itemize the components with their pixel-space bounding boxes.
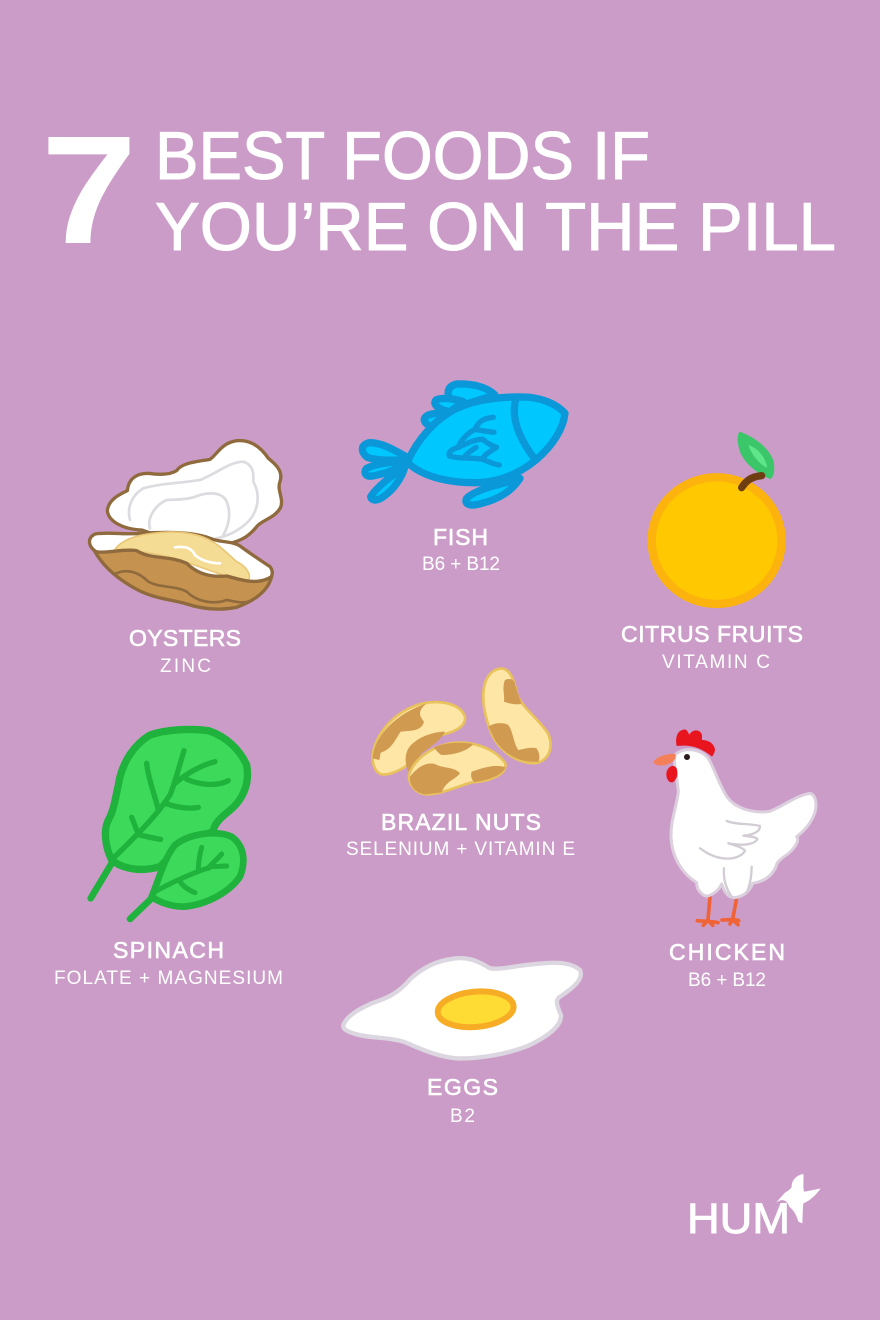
title line 1: BEST FOODS IF bbox=[155, 118, 650, 194]
panel: eggs bbox=[343, 958, 581, 1127]
nutrient: brazil nuts: SELENIUM + VITAMIN E bbox=[346, 839, 575, 860]
panel: brazil nuts bbox=[346, 669, 575, 860]
logo: HUM bbox=[687, 1174, 821, 1243]
icon: fish bbox=[362, 384, 565, 505]
title line 2: YOU’RE ON THE PILL bbox=[155, 189, 836, 265]
nutrient: citrus fruits: VITAMIN C bbox=[662, 652, 770, 673]
icon: chicken bbox=[653, 729, 816, 925]
panel: oysters bbox=[89, 441, 282, 677]
big numeral 7: 7 bbox=[41, 104, 137, 276]
panel: chicken bbox=[653, 729, 816, 991]
icon: oyster bbox=[89, 441, 282, 609]
panel: spinach bbox=[54, 729, 283, 989]
label: chicken: CHICKEN bbox=[669, 939, 785, 965]
nutrient: eggs: B2 bbox=[450, 1106, 475, 1127]
label: eggs: EGGS bbox=[427, 1074, 498, 1100]
nutrient: fish: B6 + B12 bbox=[422, 554, 500, 575]
label: oysters: OYSTERS bbox=[129, 625, 241, 651]
nutrient: oysters: ZINC bbox=[160, 656, 211, 677]
label: brazil nuts: BRAZIL NUTS bbox=[381, 809, 541, 835]
logo wordmark: HUM bbox=[687, 1195, 790, 1243]
nutrient: chicken: B6 + B12 bbox=[688, 970, 766, 991]
icon: brazil nuts bbox=[373, 669, 550, 794]
icon: spinach leaves bbox=[91, 729, 247, 919]
label: spinach: SPINACH bbox=[113, 937, 224, 963]
panel: citrus fruits bbox=[621, 432, 803, 673]
icon: fried egg bbox=[343, 958, 581, 1058]
logo hummingbird bbox=[776, 1174, 821, 1223]
panel: fish bbox=[362, 384, 565, 575]
nutrient: spinach: FOLATE + MAGNESIUM bbox=[54, 968, 283, 989]
icon: orange bbox=[652, 432, 782, 604]
label: fish: FISH bbox=[433, 524, 488, 550]
title bbox=[41, 104, 836, 276]
label: citrus fruits: CITRUS FRUITS bbox=[621, 621, 803, 647]
